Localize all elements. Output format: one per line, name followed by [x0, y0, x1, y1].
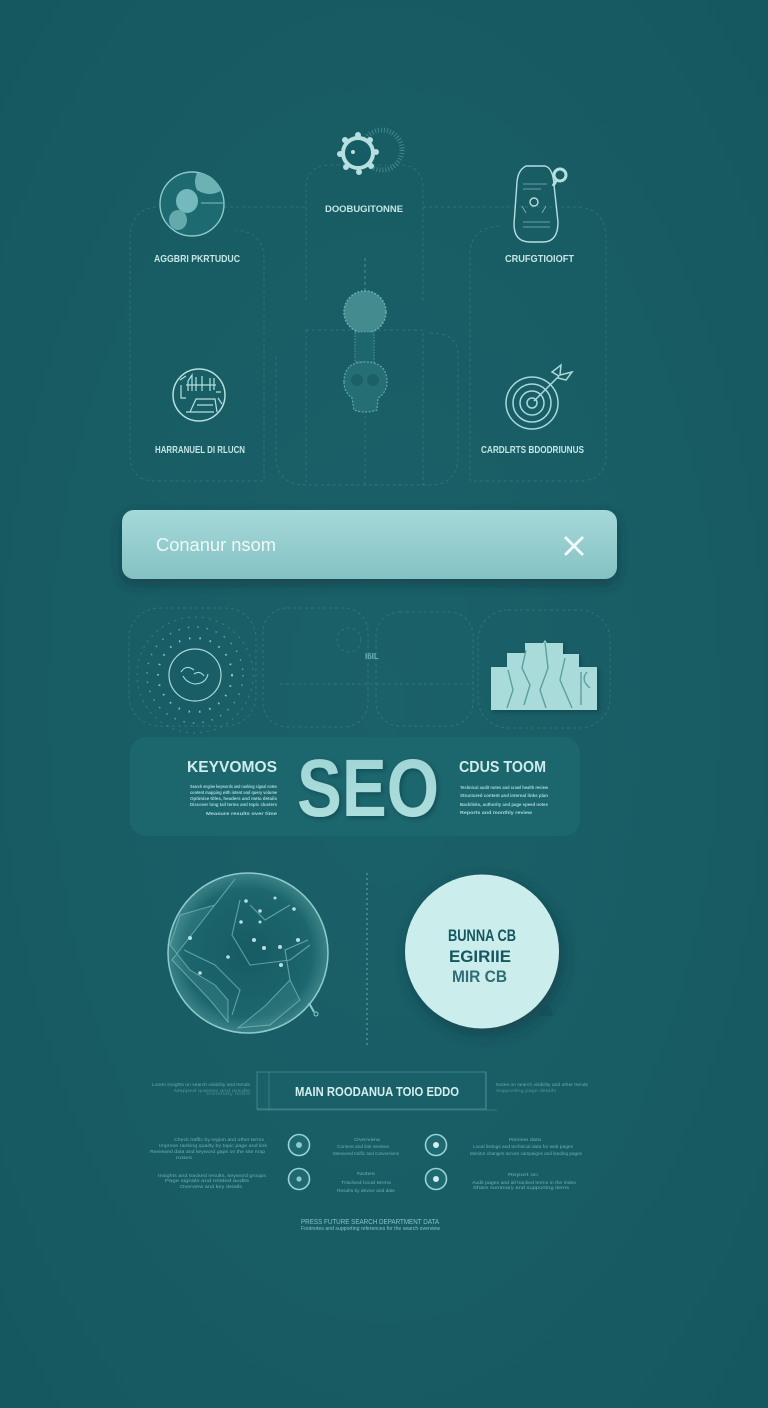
summary text — [448, 926, 516, 986]
small notes grid: Share summary and supporting items — [473, 1185, 570, 1190]
small notes grid: Tracked local terms — [341, 1180, 392, 1185]
left body text: Measure results over time — [206, 811, 278, 816]
SEO title: SEO — [297, 743, 439, 834]
left heading: KEYVOMOS — [187, 759, 277, 776]
small notes grid: Overview and key details — [180, 1184, 243, 1189]
banner — [257, 1072, 497, 1110]
label: top centre: DOOBUGITONNE — [325, 204, 403, 215]
label: top left: AGGBRI PKRTUDUC — [154, 254, 240, 265]
side notes beside banner: Summary notes — [206, 1091, 251, 1096]
small notes grid: Audit pages and all tracked terms in the index — [472, 1180, 577, 1185]
icon: radial dots — [137, 617, 253, 733]
icon: central globe and skull chain — [344, 291, 387, 412]
icon: world globe — [168, 873, 328, 1033]
small notes grid: Local listings and technical data for web pages — [473, 1144, 574, 1149]
ring icons — [288, 1134, 446, 1190]
small notes grid: Improve ranking quality by topic page and link — [159, 1143, 268, 1148]
small notes grid: Reviewed data and keyword gaps on the site map — [150, 1149, 266, 1154]
icon: stepped marble block — [491, 640, 597, 710]
icon: small glyph cluster: I6IL — [365, 652, 379, 661]
divider — [366, 873, 368, 1047]
label: lower right: CARDLRTS BDODRIUNUS — [481, 445, 584, 456]
side notes beside banner: Notes on search visibility and other trends — [496, 1082, 589, 1087]
small notes grid: Results by device and date — [337, 1188, 396, 1193]
summary text: MIR CB — [452, 967, 507, 986]
side notes beside banner — [152, 1082, 589, 1096]
bar text: Conanur nsom — [156, 535, 276, 555]
panel: middle dashed cards — [129, 608, 610, 728]
icon: circuit circle — [173, 369, 225, 421]
small notes grid: Overview — [354, 1137, 381, 1142]
side notes beside banner: Supporting page details — [496, 1088, 557, 1093]
right body text: Technical audit notes and crawl health review — [460, 785, 548, 790]
icon: pie globe — [160, 172, 224, 236]
footer text: PRESS FUTURE SEARCH DEPARTMENT DATA — [301, 1219, 439, 1226]
right body text: Reports and monthly review — [460, 810, 532, 815]
icon: gear — [337, 130, 402, 175]
label: lower left: HARRANUEL DI RLUCN — [155, 445, 245, 456]
panel: upper dashed framework — [130, 165, 606, 485]
banner text: MAIN ROODANUA TOIO EDDO — [295, 1085, 459, 1099]
summary text: EGIRIIE — [449, 947, 511, 966]
small notes grid: Insights and tracked results, keyword groups — [158, 1173, 267, 1178]
callout bar — [122, 510, 617, 579]
right body text: Backlinks, authority and page speed notes — [460, 802, 548, 807]
icon: target with arrow — [506, 365, 572, 429]
small notes grid: Page signals and related audits — [165, 1178, 250, 1183]
icon: jar with tag — [514, 166, 566, 242]
left body text: Optimise titles, headers and meta details — [190, 796, 277, 801]
panel: SEO band — [130, 737, 580, 836]
left body text: Search engine keywords and ranking signal notes — [190, 784, 277, 789]
small notes grid: Content and link reviews — [337, 1144, 390, 1149]
left body text — [190, 784, 278, 816]
small notes grid: Notes — [357, 1171, 376, 1176]
small mark beside circle — [538, 1006, 553, 1016]
left body text: content mapping with intent and query volume — [190, 790, 277, 795]
label: top right: CRUFGTIOIOFT — [505, 254, 574, 265]
side notes beside banner: Mapped queries and results — [174, 1088, 251, 1093]
small notes grid: Report on — [508, 1172, 539, 1177]
right body text: Structured content and internal links plan — [460, 793, 548, 798]
footer text: Footnotes and supporting references for the search overview — [301, 1226, 440, 1232]
side notes beside banner: Lorem insights on search visibility and trends — [152, 1082, 251, 1087]
small notes grid: Measured traffic and conversions — [333, 1151, 400, 1156]
summary text: BUNNA CB — [448, 926, 516, 945]
small notes grid — [150, 1137, 583, 1193]
footer text — [301, 1219, 440, 1232]
right body text — [460, 785, 548, 815]
icon: close cross — [565, 537, 583, 555]
small notes grid: Review data — [509, 1137, 542, 1142]
summary circle — [405, 874, 559, 1028]
right heading: CDUS TOOM — [459, 759, 546, 776]
small notes grid: notes — [176, 1155, 193, 1160]
small notes grid: Check traffic by region and other terms — [174, 1137, 265, 1142]
left body text: Discover long tail terms and topic clusters — [190, 802, 277, 807]
small notes grid: Monitor changes across campaigns and landing pages — [470, 1151, 583, 1156]
